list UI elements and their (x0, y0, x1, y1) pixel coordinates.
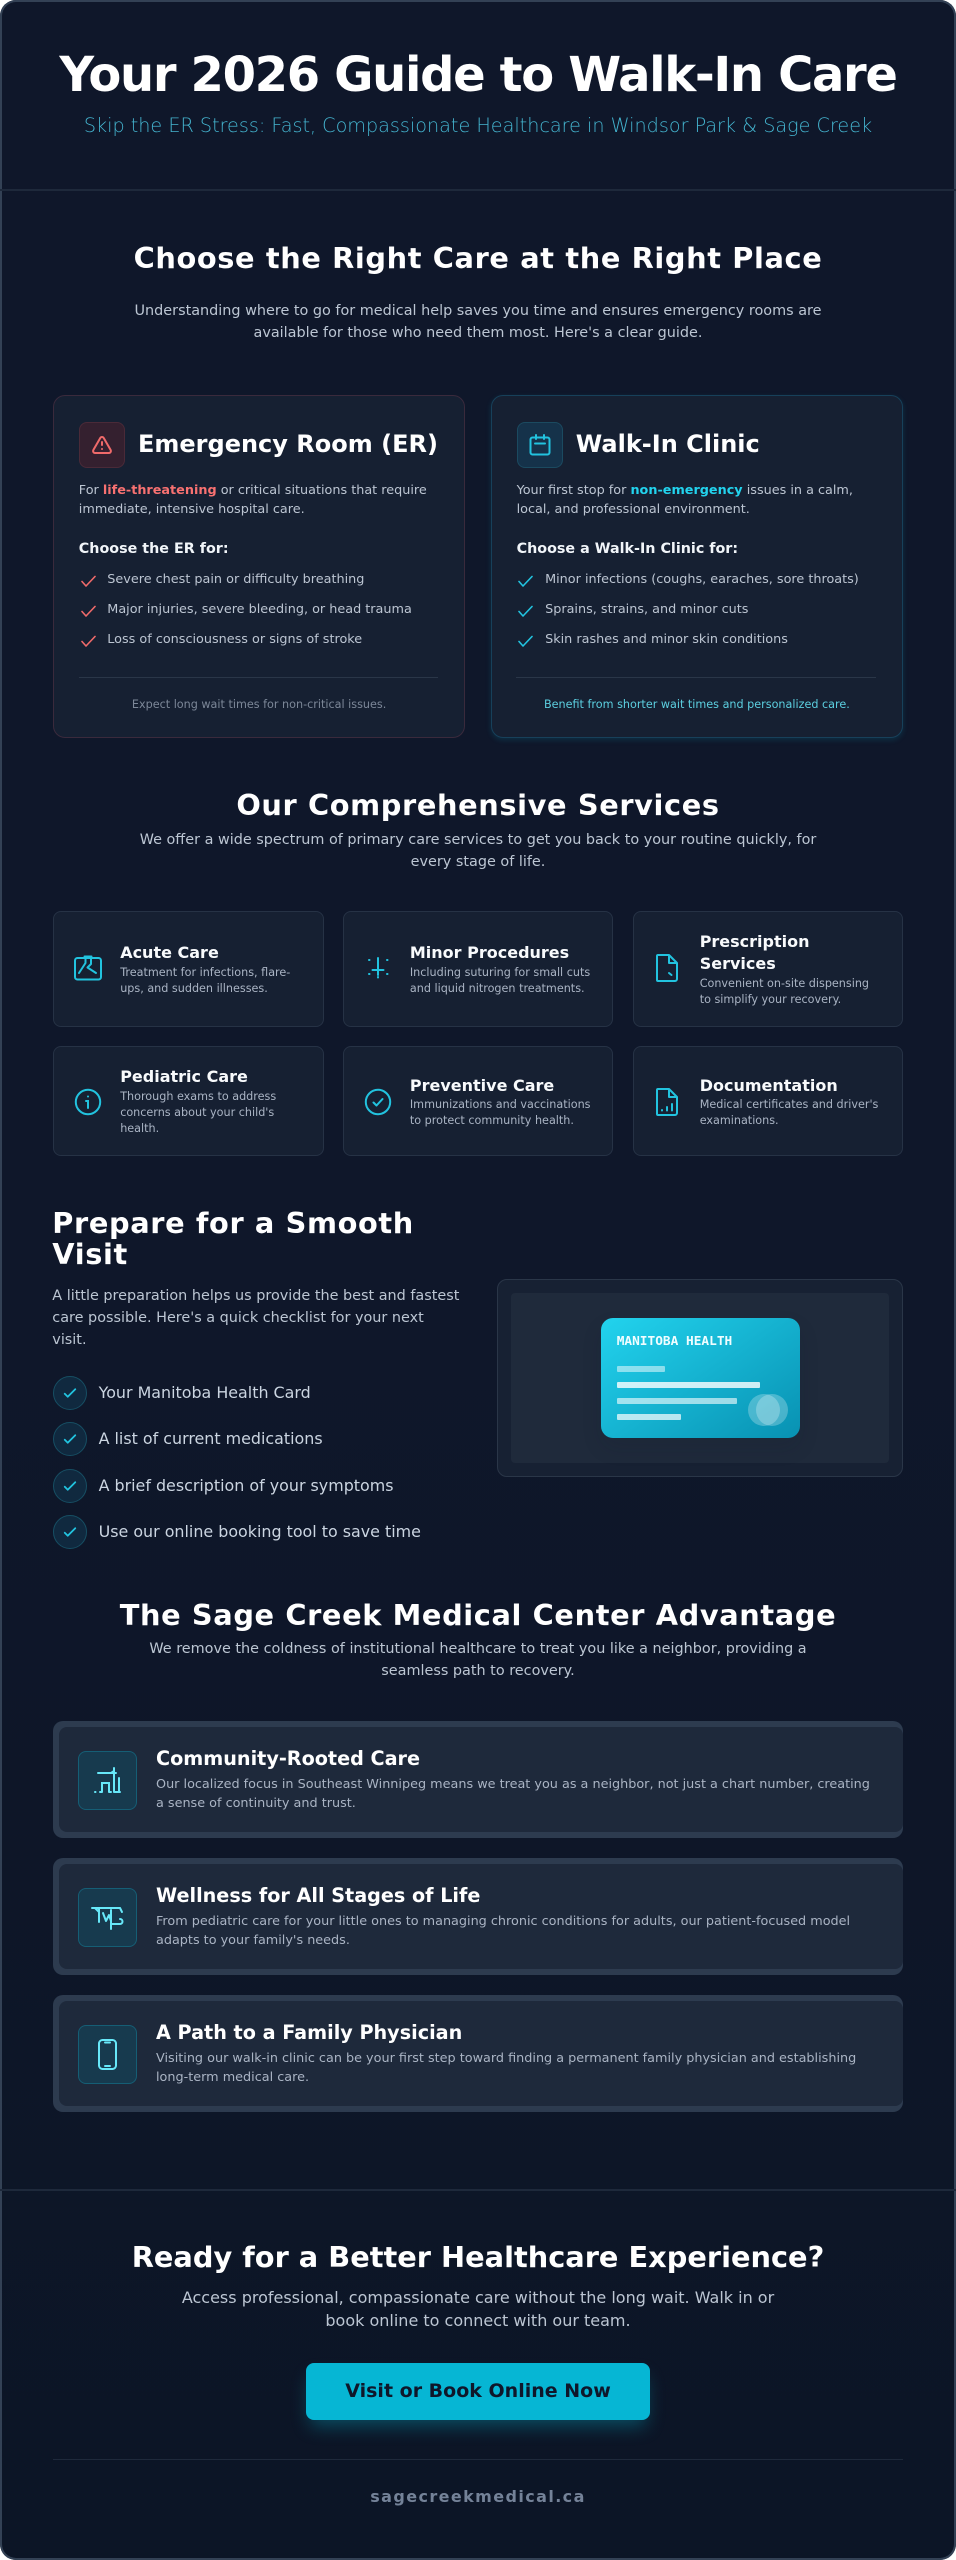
note: shorter wait: Benefit from shorter wait times and personalized care. (544, 698, 850, 711)
description: documentation: examinations. (700, 1114, 779, 1126)
panel: health card illustration (497, 1279, 903, 1477)
card: pediatric care (53, 1046, 324, 1156)
intro text: advantage: We remove the coldness of institutional healthcare to treat you like a neighbor, providing a (149, 1641, 807, 1657)
description: minor procedures: Including suturing for small cuts (410, 966, 590, 978)
description: walk-in clinic (516, 483, 853, 517)
description: prescription services (700, 976, 869, 1006)
description: wellness: adapts to your family's needs. (156, 1933, 350, 1948)
card label: MANITOBA HEALTH (617, 1334, 732, 1349)
heading: prepare: Visit (52, 1237, 128, 1271)
description: prescription services: to simplify your recovery. (700, 992, 841, 1006)
description: pediatric care: Thorough exams to address (120, 1090, 276, 1103)
footer url: sagecreekmedical.ca (370, 2487, 586, 2506)
heading: emergency room: Emergency Room (ER) (138, 430, 438, 458)
list item: sprains: Sprains, strains, and minor cuts (545, 602, 748, 617)
panel: wellness (53, 1858, 903, 1975)
description: community-rooted care (156, 1777, 870, 1811)
icon: wellness (78, 1888, 137, 1947)
description: minor procedures: and liquid nitrogen treatments. (410, 982, 585, 994)
description: emergency room (79, 483, 427, 517)
title: minor procedures: Minor Procedures (410, 943, 569, 962)
heading: prepare: Prepare for a Smooth (52, 1206, 414, 1240)
description: wellness: From pediatric care for your little ones to managing chronic conditions for adults, our patient-focused model (156, 1914, 850, 1929)
description: walk-in clinic: Your first stop for non-emergency issues in a calm, (517, 483, 853, 498)
intro text: prepare: visit. (52, 1332, 87, 1348)
checklist item: health card (53, 1376, 87, 1410)
intro text: prepare (52, 1288, 460, 1348)
description: documentation: Medical certificates and driver's (700, 1098, 878, 1110)
icon: phone (78, 2025, 137, 2084)
description: emergency room: immediate, intensive hospital care. (79, 502, 305, 517)
title: Your 2026 Guide to Walk-In Care (59, 47, 897, 103)
description: preventive care (410, 1098, 590, 1126)
description: family physician: long-term medical care. (156, 2070, 309, 2085)
intro text: choose the right care: available for those who need them most. Here's a clear guide. (254, 325, 702, 341)
title: pediatric care: Pediatric Care (120, 1067, 248, 1086)
icon: acute care (74, 956, 102, 980)
icon: minor procedures (368, 957, 388, 978)
icon: check circle (364, 1088, 392, 1116)
text: call to action (182, 2288, 774, 2330)
description: pediatric care: health. (120, 1122, 159, 1135)
description: acute care (120, 966, 290, 994)
checklist text: booking: Use our online booking tool to save time (99, 1522, 421, 1541)
card: documentation (632, 1046, 903, 1156)
icon: warning triangle (79, 422, 125, 468)
title: prescription services: Services (700, 954, 776, 973)
heading: prepare (52, 1206, 414, 1271)
intro text: advantage: seamless path to recovery. (381, 1663, 575, 1679)
title: wellness: Wellness for All Stages of Life (156, 1884, 480, 1907)
card: prescription services (632, 911, 903, 1027)
list item: stroke: Loss of consciousness or signs of stroke (107, 632, 362, 647)
list item: infections: Minor infections (coughs, earaches, sore throats) (545, 572, 859, 587)
intro text: choose the right care: Understanding where to go for medical help saves you time and ensures emergency rooms are (135, 303, 821, 319)
card: acute care (53, 911, 324, 1027)
intro text: services: We offer a wide spectrum of primary care services to get you back to your routine quickly, for (140, 832, 816, 848)
list item: injuries: Major injuries, severe bleeding, or head trauma (107, 602, 412, 617)
heading: services: Our Comprehensive Services (236, 788, 720, 822)
description: pediatric care: concerns about your child's (120, 1106, 274, 1119)
button: visit or book (306, 2363, 650, 2420)
title: family physician: A Path to a Family Physician (156, 2021, 462, 2044)
intro text: services (140, 832, 816, 870)
icon: calendar (517, 422, 563, 468)
button: visit or book: Visit or Book Online Now (345, 2380, 611, 2402)
description: wellness (156, 1914, 850, 1948)
heading: call to action: Ready for a Better Healthcare Experience? (132, 2240, 824, 2274)
intro text: services: every stage of life. (411, 854, 545, 870)
icon: info circle (74, 1088, 102, 1116)
card: preventive care (343, 1046, 613, 1156)
checklist text: medications: A list of current medications (99, 1429, 323, 1448)
intro text: choose the right care (135, 303, 821, 341)
title: documentation: Documentation (700, 1076, 838, 1095)
subtitle: Skip the ER Stress: Fast, Compassionate Healthcare in Windsor Park & Sage Creek (84, 114, 872, 137)
title: preventive care: Preventive Care (410, 1076, 554, 1095)
heading: choose the right care: Choose the Right Care at the Right Place (134, 241, 822, 275)
checklist text: symptoms: A brief description of your symptoms (99, 1476, 394, 1495)
description: minor procedures (410, 966, 590, 994)
checklist text: health card: Your Manitoba Health Card (99, 1383, 311, 1402)
icon: document chart (656, 1088, 678, 1116)
description: preventive care: Immunizations and vaccinations (410, 1098, 590, 1110)
title: prescription services: Prescription (700, 932, 810, 951)
description: community-rooted care: Our localized focus in Southeast Winnipeg means we treat you as a neighbor, not just a chart number, creating (156, 1777, 870, 1792)
intro text: advantage (149, 1641, 807, 1679)
list item: skin: Skin rashes and minor skin conditions (545, 632, 788, 647)
panel: community-rooted care (53, 1721, 903, 1838)
checklist item: medications (53, 1422, 87, 1456)
title: community-rooted care: Community-Rooted Care (156, 1747, 420, 1770)
heading: advantage: The Sage Creek Medical Center Advantage (120, 1598, 836, 1632)
panel: walk-in clinic (491, 395, 903, 738)
note: wait times: Expect long wait times for non-critical issues. (132, 698, 386, 711)
heading: walk-in clinic: Walk-In Clinic (576, 430, 760, 458)
description: acute care: Treatment for infections, flare- (120, 966, 290, 978)
checklist: prepare (53, 1376, 421, 1549)
description: walk-in clinic: local, and professional environment. (517, 502, 750, 517)
description: family physician (156, 2051, 856, 2085)
intro text: prepare: care possible. Here's a quick checklist for your next (52, 1310, 424, 1326)
description: acute care: ups, and sudden illnesses. (120, 982, 268, 994)
subheading: choose a walk-in clinic: Choose a Walk-In Clinic for: (517, 541, 738, 557)
panel: family physician (53, 1995, 903, 2112)
text: call to action: Access professional, compassionate care without the long wait. Walk in or (182, 2288, 774, 2307)
checklist item: booking (53, 1515, 87, 1549)
icon: prescription document (656, 954, 678, 982)
description: community-rooted care: a sense of continuity and trust. (156, 1796, 356, 1811)
checklist item: symptoms (53, 1469, 87, 1503)
description: prescription services: Convenient on-site dispensing (700, 976, 869, 990)
description: emergency room: For life-threatening or critical situations that require (79, 483, 427, 498)
intro text: prepare: A little preparation helps us provide the best and fastest (52, 1288, 459, 1304)
description: documentation (700, 1098, 878, 1126)
description: preventive care: to protect community health. (410, 1114, 574, 1126)
description: family physician: Visiting our walk-in clinic can be your first step toward finding a permanent family physician and establishing (156, 2051, 856, 2066)
subheading: choose the ER: Choose the ER for: (79, 541, 229, 557)
title: acute care: Acute Care (120, 943, 219, 962)
text: call to action: book online to connect with our team. (325, 2311, 631, 2330)
illustration: health card (601, 1318, 800, 1438)
card: minor procedures (343, 911, 613, 1027)
description: pediatric care (120, 1090, 276, 1135)
panel: emergency room (53, 395, 465, 738)
list item: chest pain: Severe chest pain or difficulty breathing (107, 572, 364, 587)
icon: community (78, 1751, 137, 1810)
title: prescription services (700, 932, 810, 973)
